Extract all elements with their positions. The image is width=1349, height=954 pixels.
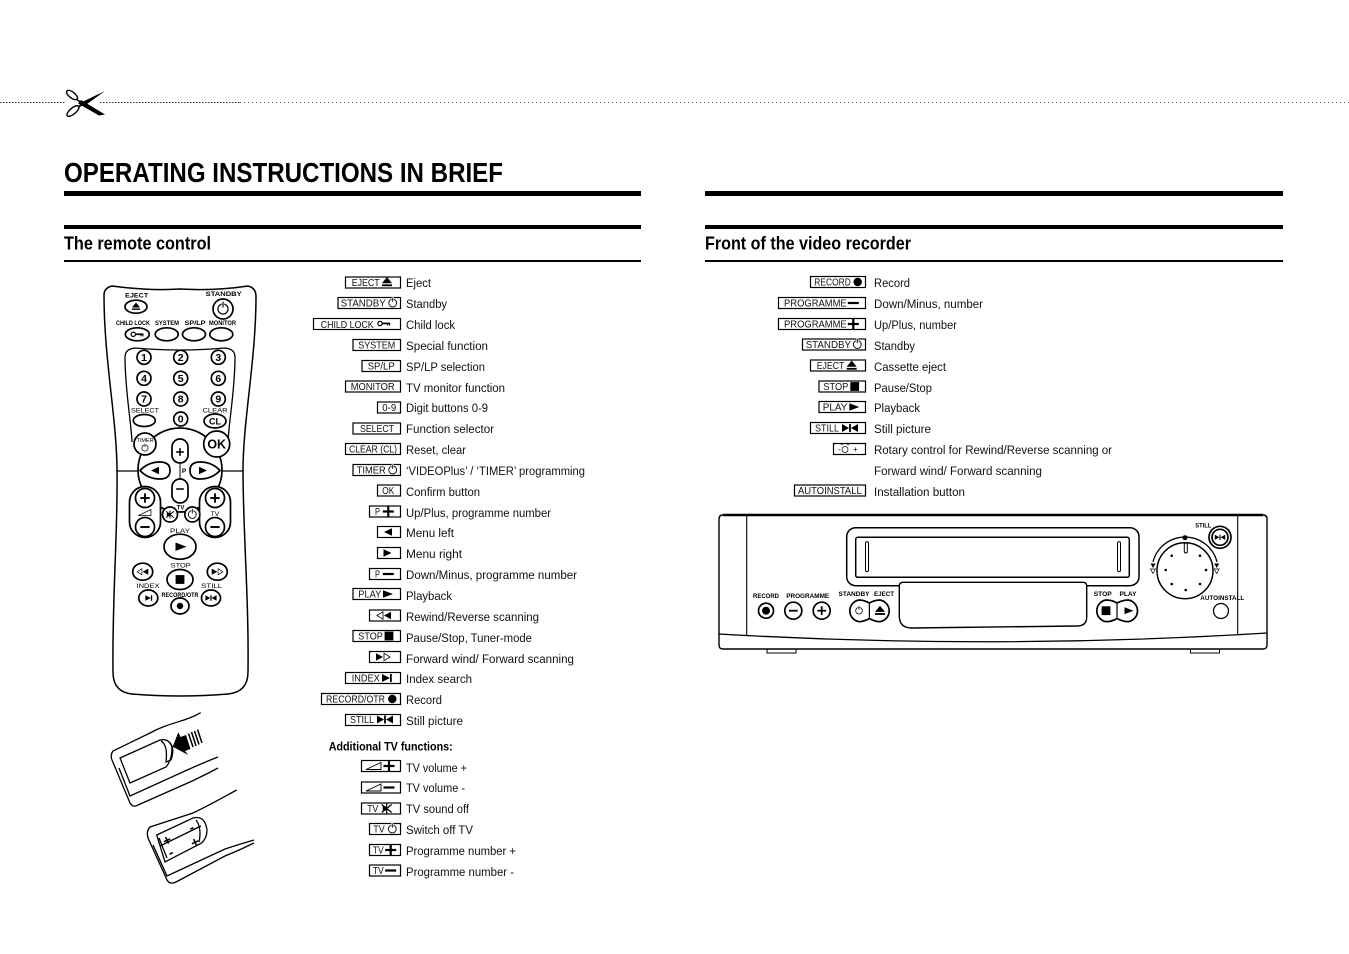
row: play <box>353 588 453 603</box>
digit keypad: 8 <box>178 394 184 406</box>
row: stop <box>819 381 932 395</box>
row: standby: STANDBY <box>806 340 851 351</box>
row: still <box>346 714 463 728</box>
record and programme buttons <box>753 593 830 619</box>
row: tv programme plus: TV <box>373 846 384 856</box>
row: programme plus <box>778 318 957 332</box>
rotary control <box>1150 535 1219 599</box>
TV volume and programme rockers: TV <box>177 506 184 512</box>
digit keypad: 6 <box>215 373 221 385</box>
standby and eject buttons: EJECT <box>874 591 895 598</box>
panel: front of the video recorder heading <box>705 225 1283 262</box>
row: autoinstall <box>794 485 965 499</box>
transport buttons: RECORD/OTR <box>162 593 199 599</box>
top buttons <box>116 291 242 341</box>
navigation ring <box>117 428 243 512</box>
recorder body <box>719 515 1267 649</box>
battery cover illustration <box>111 713 218 806</box>
digit keypad: 1 <box>141 352 147 364</box>
display window <box>899 582 1087 628</box>
top buttons: CHILD LOCK <box>116 320 150 327</box>
row: tv power: Switch off TV <box>406 823 474 837</box>
row: eject: EJECT <box>352 278 380 289</box>
remote control illustration <box>104 286 256 696</box>
stop and play buttons <box>1094 591 1137 622</box>
standby and eject buttons: STANDBY <box>838 591 870 598</box>
row: rotary control: - <box>838 445 841 454</box>
row: tv power <box>370 823 474 837</box>
row: tv mute <box>362 802 470 816</box>
still button <box>1195 522 1231 548</box>
video recorder front illustration <box>719 515 1267 653</box>
title: OPERATING INSTRUCTIONS IN BRIEF <box>64 157 503 188</box>
digit keypad: 4 <box>141 373 147 385</box>
row: eject: Eject <box>406 276 432 290</box>
battery compartment illustration: - <box>165 844 176 860</box>
digit keypad: 5 <box>178 373 184 385</box>
top buttons: MONITOR <box>209 320 236 327</box>
top buttons: STANDBY <box>206 291 242 298</box>
row: select: SELECT <box>360 424 395 435</box>
row: system: SYSTEM <box>358 340 395 352</box>
digit keypad: CL <box>209 417 221 427</box>
row: select: Function selector <box>406 422 494 436</box>
row: record: Record <box>406 693 442 707</box>
icon: scissors <box>65 89 105 118</box>
row: tv power: TV <box>373 824 385 836</box>
row: still: Still picture <box>874 422 931 436</box>
row: record: Record <box>874 276 910 290</box>
digit keypad: CLEAR <box>202 408 228 414</box>
row: programme plus: Up/Plus, number <box>874 318 957 332</box>
feet <box>767 648 796 653</box>
row: still: STILL <box>350 715 374 726</box>
row: forward: Forward wind/ Forward scanning <box>406 652 574 666</box>
row: still: Still picture <box>406 714 463 728</box>
row: p minus: P <box>375 570 380 580</box>
standby and eject buttons <box>838 591 895 622</box>
row: tv mute: TV sound off <box>406 802 470 816</box>
row: tv volume minus: TV volume - <box>406 781 465 795</box>
row: sp/lp: SP/LP selection <box>406 360 485 374</box>
row: clear: Reset, clear <box>406 443 466 457</box>
digit keypad: 9 <box>215 394 221 406</box>
row: record <box>810 276 910 290</box>
navigation ring: TIMER <box>136 438 154 444</box>
row: programme minus: PROGRAMME <box>784 299 847 310</box>
row: eject: Cassette eject <box>874 360 947 374</box>
TV volume and programme rockers: TV <box>211 511 220 518</box>
row: record: RECORD <box>814 278 851 289</box>
digit keypad: SELECT <box>131 408 159 414</box>
row: index: Index search <box>406 672 472 686</box>
panel: front of the video recorder heading: Front of the video recorder <box>705 232 911 254</box>
autoinstall button <box>1200 595 1244 618</box>
row: tv programme plus: Programme number + <box>406 844 516 858</box>
navigation ring: P <box>182 468 187 475</box>
battery compartment illustration: - <box>186 819 197 835</box>
row: rotary control: + <box>853 445 858 454</box>
navigation ring: OK <box>207 438 226 452</box>
panel: remote control heading <box>64 225 641 262</box>
transport buttons: INDEX <box>136 583 160 590</box>
row: select <box>353 422 494 436</box>
row: programme minus <box>778 297 983 311</box>
row: rewind: Rewind/Reverse scanning <box>406 610 539 624</box>
top buttons: SP/LP <box>184 320 206 327</box>
row: stop: Pause/Stop, Tuner-mode <box>406 631 532 645</box>
row: still: STILL <box>815 424 839 435</box>
panel: remote control heading: The remote control <box>64 232 211 254</box>
row: stop: STOP <box>823 382 848 393</box>
row: eject <box>346 276 432 290</box>
transport buttons: STOP <box>171 562 191 570</box>
row: play: Playback <box>406 589 453 603</box>
row: tv volume plus <box>362 760 467 775</box>
panel: additional TV functions list <box>362 760 516 879</box>
row: child lock: Child lock <box>406 318 456 332</box>
row: autoinstall: AUTOINSTALL <box>798 486 862 497</box>
row: play: Playback <box>874 401 921 415</box>
row: tv volume plus: TV volume + <box>406 761 467 775</box>
row: p plus: Up/Plus, programme number <box>406 506 551 520</box>
row: tv programme plus <box>370 844 516 858</box>
row: standby <box>338 297 448 311</box>
row: index <box>346 672 472 686</box>
row: still <box>810 422 931 436</box>
remote body <box>104 286 256 696</box>
row: tv programme minus: Programme number - <box>406 865 514 879</box>
row: child lock <box>314 318 456 332</box>
row: play: PLAY <box>358 590 381 601</box>
row: menu left <box>378 526 455 540</box>
record and programme buttons: RECORD <box>753 593 779 600</box>
row: tv mute: TV <box>367 804 378 815</box>
row: monitor: MONITOR <box>351 382 395 393</box>
top buttons: EJECT <box>125 292 149 300</box>
row: standby <box>802 338 916 353</box>
digit keypad: 7 <box>141 394 147 406</box>
row: menu left: Menu left <box>406 526 455 540</box>
title rule left <box>64 191 641 196</box>
TV volume and programme rockers <box>130 486 230 538</box>
row: digits <box>378 401 488 415</box>
record and programme buttons: PROGRAMME <box>786 593 830 600</box>
row: play <box>819 401 921 415</box>
row: menu right <box>378 547 463 561</box>
additional TV functions heading: Additional TV functions: <box>329 740 453 754</box>
row: ok: Confirm button <box>406 485 480 499</box>
digit keypad: 3 <box>215 352 221 364</box>
row: digits: 0-9 <box>382 403 396 414</box>
battery compartment illustration: + <box>188 833 202 851</box>
row: programme plus: PROGRAMME <box>784 320 847 331</box>
row: system: Special function <box>406 339 488 353</box>
still button: STILL <box>1195 522 1211 530</box>
row: standby: Standby <box>874 339 916 353</box>
row: p plus: P <box>375 507 380 518</box>
title rule right <box>705 191 1283 196</box>
row: programme minus: Down/Minus, number <box>874 297 983 311</box>
autoinstall button: AUTOINSTALL <box>1200 595 1244 602</box>
row: stop: Pause/Stop <box>874 381 932 395</box>
row: timer: ‘VIDEOPlus’ / ‘TIMER’ programming <box>406 464 585 478</box>
panel: front of recorder key list <box>778 276 1112 499</box>
row: monitor: TV monitor function <box>406 381 505 395</box>
row: record <box>322 693 442 707</box>
row: standby: Standby <box>406 297 448 311</box>
row: eject <box>810 360 947 374</box>
row: monitor <box>346 381 505 395</box>
battery compartment illustration: + <box>160 831 174 849</box>
digit keypad <box>125 348 235 442</box>
row: record: RECORD/OTR <box>326 695 385 706</box>
row: clear <box>346 443 466 457</box>
row: play: PLAY <box>823 403 847 414</box>
row: sp/lp <box>362 360 485 374</box>
stop and play buttons: STOP <box>1094 591 1112 598</box>
transport buttons: STILL <box>201 583 222 590</box>
cassette slot <box>847 528 1139 586</box>
row: standby: STANDBY <box>341 298 386 310</box>
transport buttons <box>133 528 227 614</box>
stop and play buttons: PLAY <box>1120 591 1137 598</box>
text: rotary control continuation: Forward wind/ Forward scanning <box>874 464 1042 478</box>
row: system <box>353 339 488 353</box>
row: p minus: Down/Minus, programme number <box>406 568 577 582</box>
digit keypad: 0 <box>178 414 184 426</box>
row: ok <box>378 485 480 499</box>
row: ok: OK <box>382 486 394 497</box>
row: rotary control: Rotary control for Rewind/Reverse scanning or <box>874 443 1112 457</box>
row: index: INDEX <box>352 674 380 685</box>
row: tv volume minus <box>362 781 465 795</box>
digit keypad: 2 <box>178 352 184 364</box>
row: digits: Digit buttons 0-9 <box>406 401 488 415</box>
row: menu right: Menu right <box>406 547 463 561</box>
row: eject: EJECT <box>817 361 845 372</box>
row: stop: STOP <box>358 632 383 643</box>
dotted cut line <box>0 102 1349 104</box>
top buttons: SYSTEM <box>155 320 179 327</box>
row: autoinstall: Installation button <box>874 485 965 499</box>
transport buttons: PLAY <box>170 528 191 535</box>
row: clear: CLEAR (CL) <box>349 444 397 456</box>
row: child lock: CHILD LOCK <box>321 320 374 331</box>
row: sp/lp: SP/LP <box>368 362 395 372</box>
row: timer: TIMER <box>357 466 386 476</box>
row: tv programme minus: TV <box>373 866 384 877</box>
battery compartment illustration <box>147 790 254 883</box>
icon: insertion arrow <box>173 730 202 755</box>
row: stop <box>353 630 532 645</box>
panel: remote control key list <box>314 276 585 728</box>
